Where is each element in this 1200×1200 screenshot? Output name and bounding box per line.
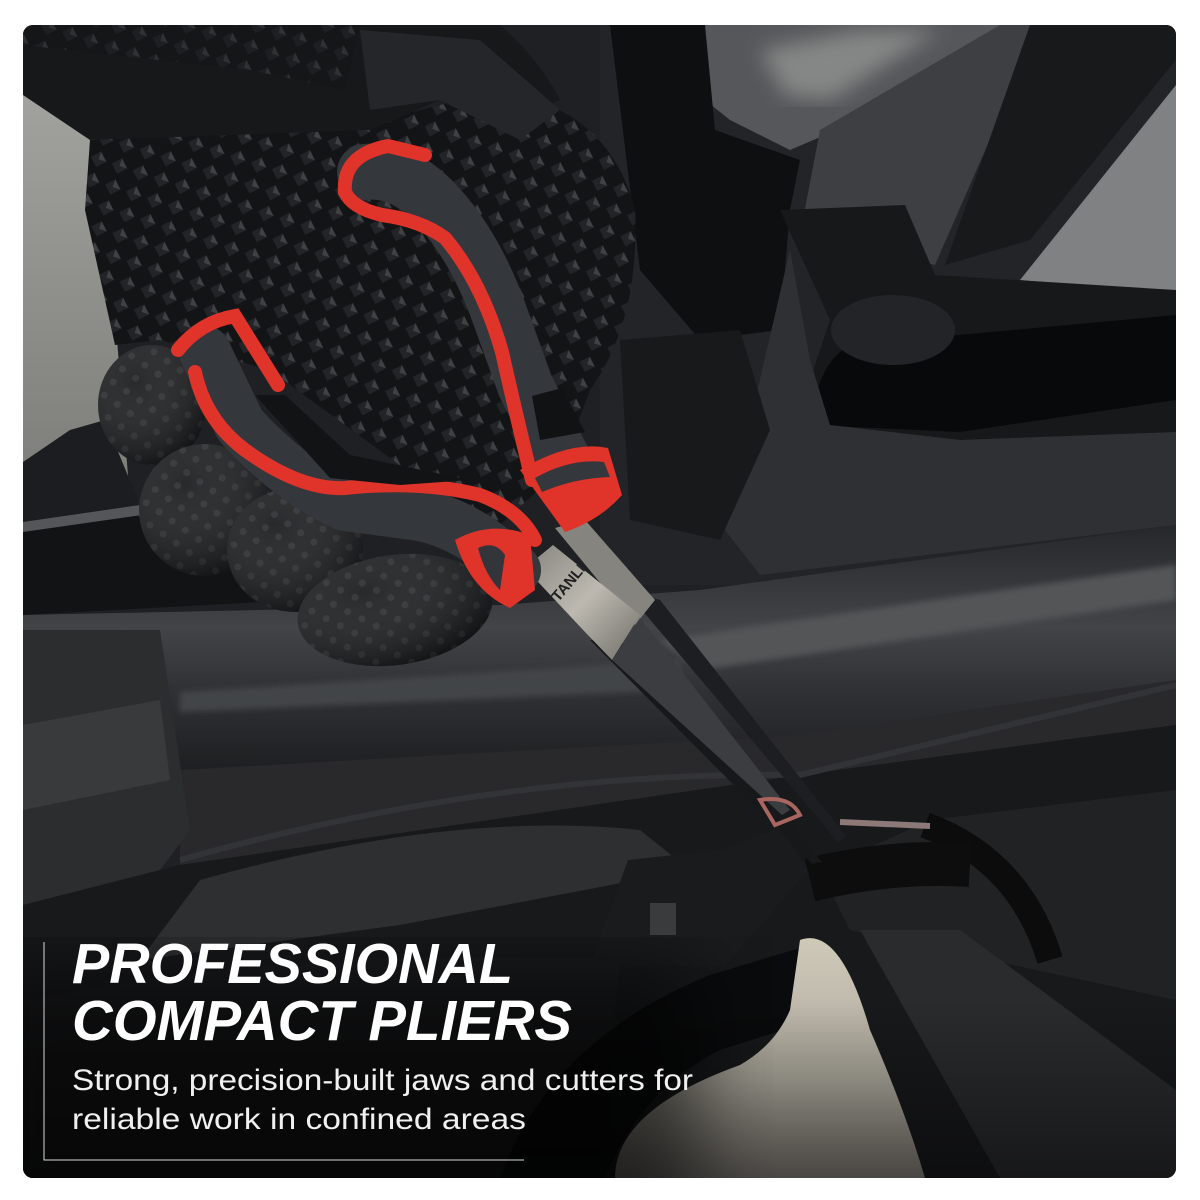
wiring loom and lower bay bbox=[23, 685, 1176, 1178]
glove: fingers bbox=[98, 345, 500, 678]
subheading text: Strong, precision-built jaws and cutters for bbox=[72, 1064, 693, 1097]
wire tip detail bbox=[760, 799, 930, 826]
heading: COMPACT PLIERS bbox=[72, 989, 572, 1053]
subheading text: reliable work in confined areas bbox=[72, 1103, 526, 1136]
heading: PROFESSIONAL bbox=[72, 932, 513, 996]
bright reservoir bottle bbox=[615, 938, 925, 1178]
pliers: jaws and head: STANLEY bbox=[542, 549, 599, 613]
glove: back of hand bbox=[85, 90, 635, 525]
heading bbox=[72, 932, 572, 1053]
subheading text bbox=[72, 1064, 693, 1136]
pliers: upper handle bbox=[345, 146, 622, 532]
background: car body top right bbox=[600, 25, 1180, 585]
background: bright wall at left bbox=[23, 95, 128, 476]
decorative frame line bbox=[44, 942, 524, 1160]
pliers: jaws and head bbox=[538, 522, 822, 864]
pliers: lower handle bbox=[178, 316, 535, 608]
text shade bbox=[0, 965, 700, 1200]
left foam block bbox=[23, 630, 190, 905]
rubber sill strip bbox=[23, 543, 1176, 730]
